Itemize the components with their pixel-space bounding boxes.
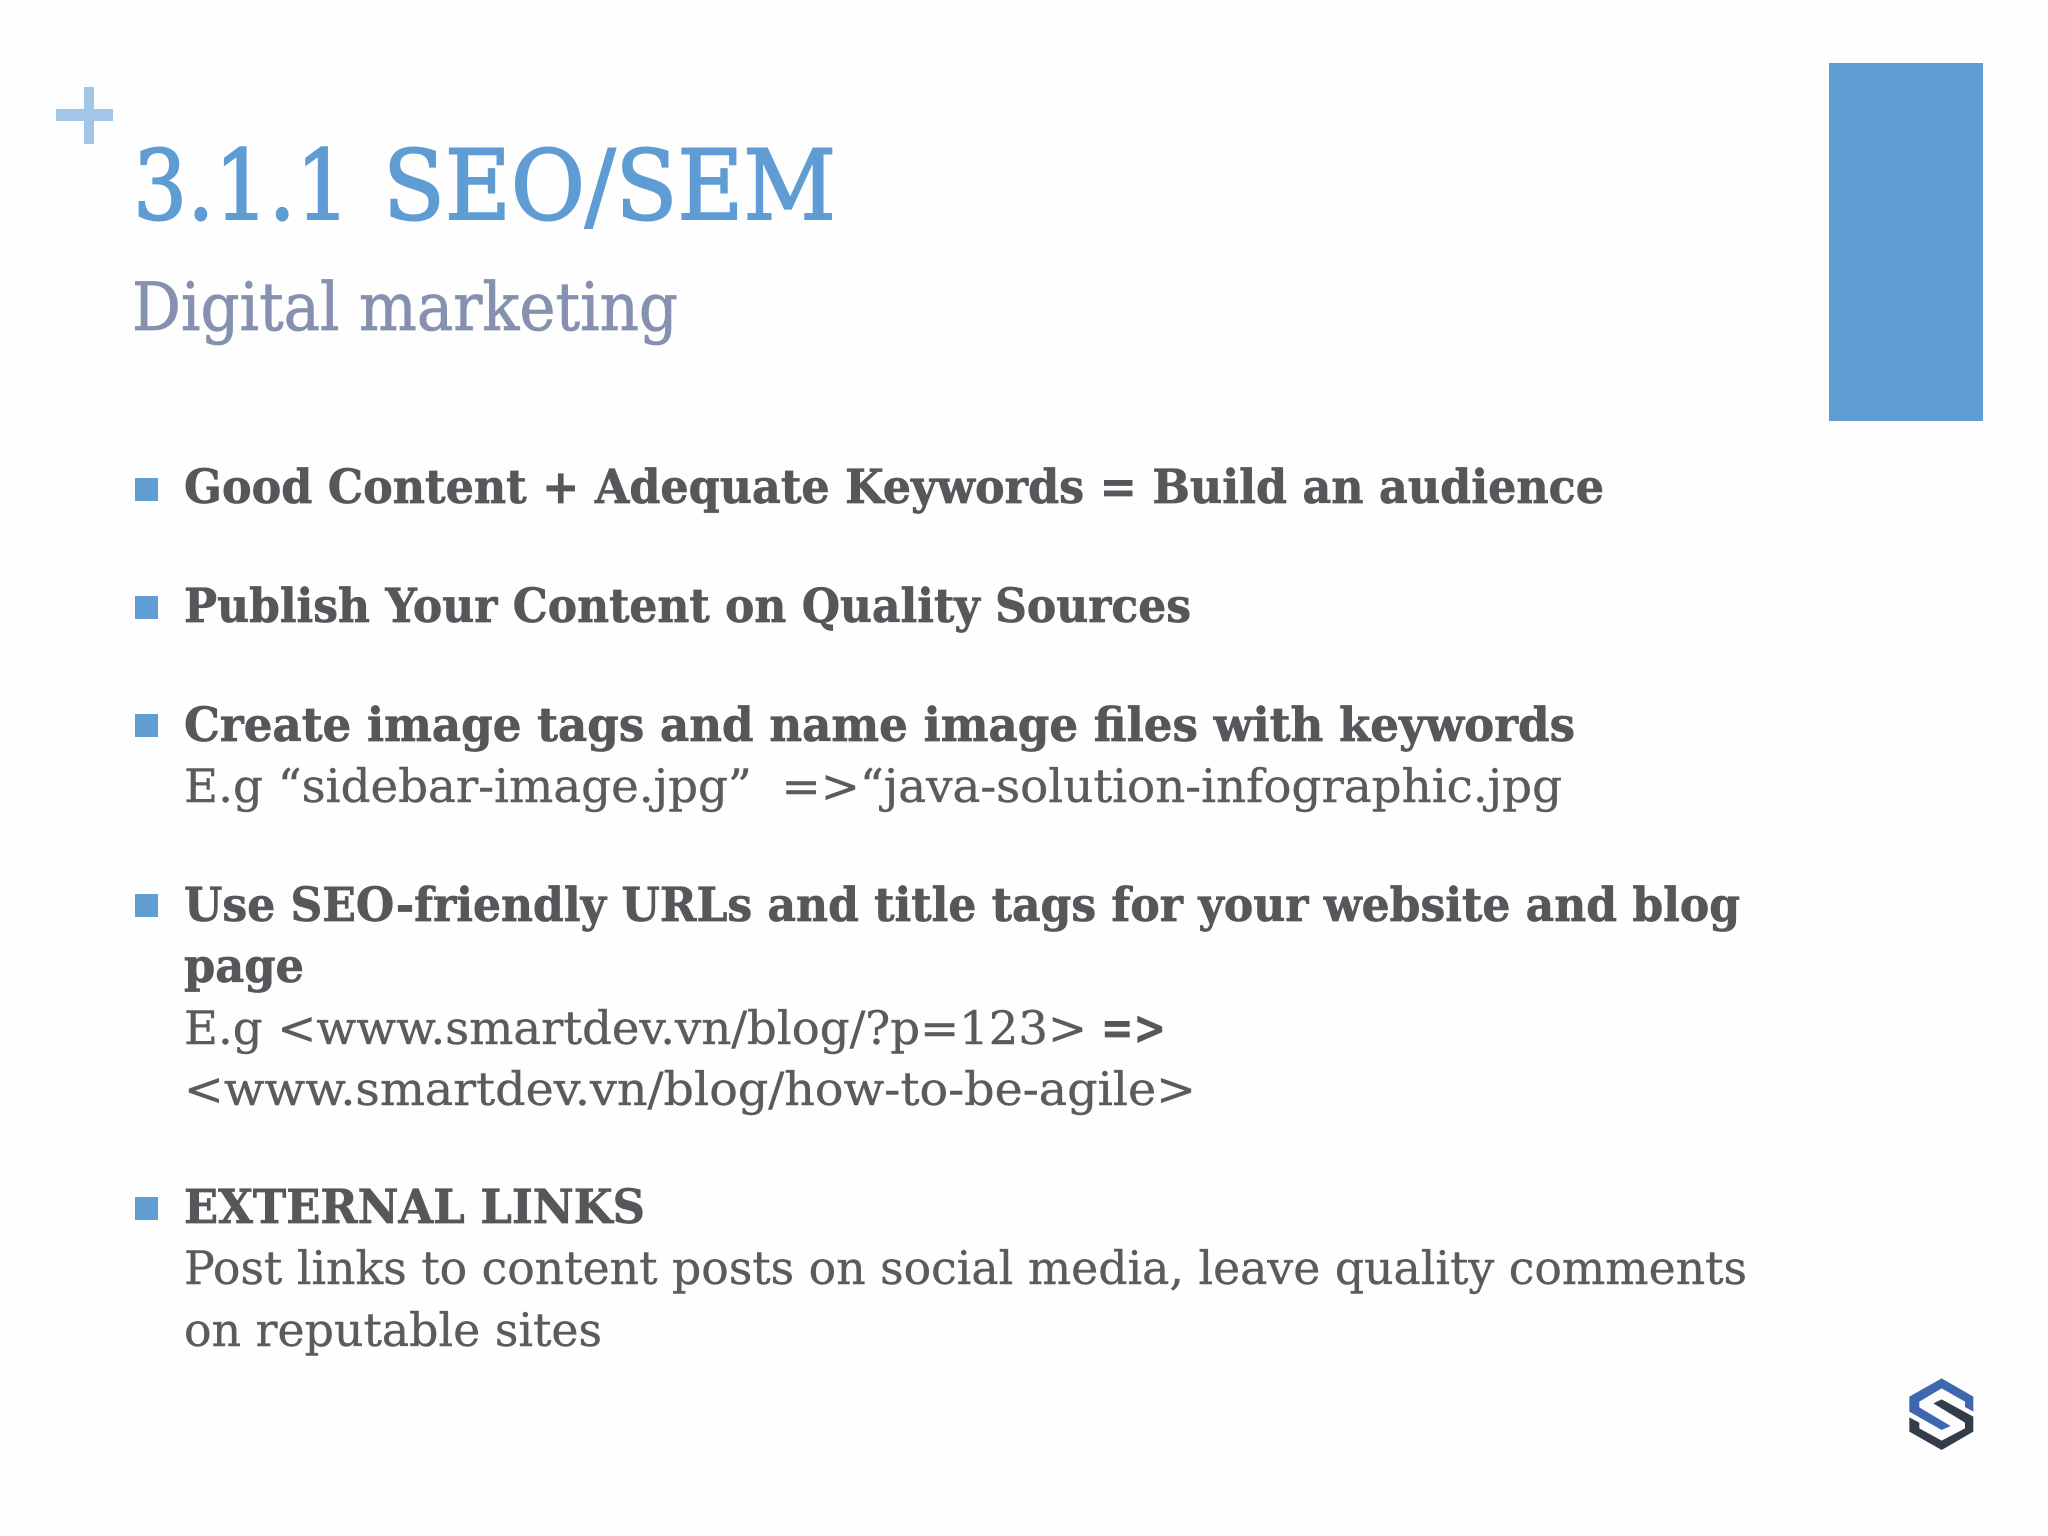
logo (1909, 1378, 1973, 1450)
title (133, 130, 836, 242)
bullet 3: Create image tags and name image files with keywords (184, 698, 1575, 753)
title: 3.1.1 (133, 130, 350, 242)
bullet 4: page (184, 939, 304, 994)
bullet 5 (135, 1180, 1747, 1357)
bullet 4: <www.smartdev.vn/blog/how-to-be-agile> (184, 1062, 1196, 1116)
title: SEO/SEM (383, 130, 836, 242)
accent rectangle (1829, 63, 1983, 421)
subtitle: Digital marketing (132, 269, 678, 346)
bullet 1: Good Content + Adequate Keywords = Build an audience (184, 460, 1604, 515)
bullet 5: Post links to content posts on social media, leave quality comments (184, 1241, 1747, 1295)
bullet 4 (135, 878, 1740, 1116)
bullet 4: => (1101, 1001, 1166, 1056)
bullet 5: EXTERNAL LINKS (184, 1180, 645, 1235)
bullet 2: Publish Your Content on Quality Sources (184, 579, 1191, 634)
bullet list (135, 460, 1747, 1357)
plus icon (56, 87, 113, 144)
bullet 4: Use SEO-friendly URLs and title tags for your website and blog (184, 878, 1740, 933)
bullet 3 (135, 698, 1575, 813)
bullet 4: E.g <www.smartdev.vn/blog/?p=123> (184, 1001, 1087, 1055)
bullet 3: E.g “sidebar-image.jpg” =>“java-solution-infographic.jpg (184, 759, 1562, 813)
bullet 5: on reputable sites (184, 1303, 602, 1357)
